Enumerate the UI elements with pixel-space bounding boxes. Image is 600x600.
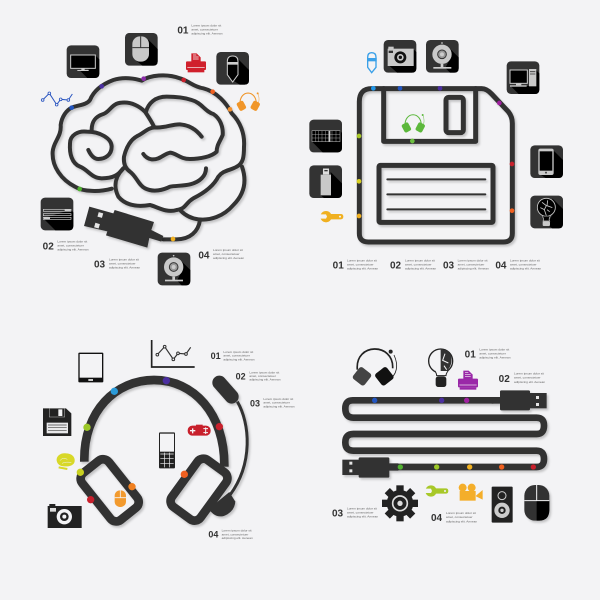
label 02: amet, consectetuer bbox=[57, 243, 84, 247]
icon: pencil bbox=[216, 52, 249, 85]
label 01: amet, consectetuer bbox=[191, 28, 218, 32]
label 03: adipiscing elit. Aenean bbox=[458, 267, 489, 271]
label 04 bbox=[495, 258, 541, 272]
label 01 bbox=[177, 24, 223, 36]
label 03 bbox=[443, 258, 489, 272]
label 03: 03 bbox=[332, 509, 344, 520]
label 01: Lorem ipsum dolor sit bbox=[479, 347, 509, 351]
icon: gamepad bbox=[188, 425, 211, 436]
icon: brain bbox=[57, 453, 75, 469]
icon: camera bbox=[384, 40, 416, 73]
label 03: Lorem ipsum dolor sit bbox=[458, 258, 488, 262]
label 04: amet, consectetuer bbox=[446, 515, 473, 519]
label 03: 03 bbox=[443, 261, 455, 272]
label 03: Lorem ipsum dolor sit bbox=[347, 506, 377, 510]
label 04: amet, consectetuer bbox=[222, 532, 248, 536]
label 02: 02 bbox=[236, 372, 246, 382]
usb cable bbox=[342, 390, 547, 478]
label 03: adipiscing elit. Aenean bbox=[109, 266, 140, 270]
icon: wrench bbox=[425, 485, 448, 497]
icon: headset bbox=[401, 114, 426, 133]
icon: line chart bbox=[41, 92, 72, 106]
cable dots bbox=[77, 377, 223, 503]
icon: printer bbox=[186, 53, 206, 72]
label 02 bbox=[390, 258, 436, 272]
label 02: amet, consectetuer bbox=[405, 262, 432, 266]
icon: usb stick bbox=[309, 165, 342, 198]
icon: speaker bbox=[492, 487, 513, 523]
label 04: 04 bbox=[431, 513, 443, 524]
label 04: amet, consectetuer bbox=[213, 252, 240, 256]
icon: phone bbox=[159, 432, 175, 468]
label 03 bbox=[332, 506, 378, 520]
label 01: amet, consectetuer bbox=[223, 354, 250, 358]
cable dots bbox=[372, 398, 536, 470]
icon: bulb bbox=[530, 196, 563, 228]
label 04: adipiscing elit. Aenean bbox=[446, 519, 477, 523]
icon: gear bbox=[382, 485, 418, 521]
headphones bbox=[78, 380, 247, 524]
label 04: 04 bbox=[208, 530, 218, 540]
icon: headset bbox=[236, 92, 261, 112]
label 02: Lorem ipsum dolor sit bbox=[514, 372, 544, 376]
label 01: amet, consectetuer bbox=[347, 262, 374, 266]
label 03: adipiscing elit. Aenean bbox=[263, 404, 295, 408]
label 01: adipiscing elit. Aenean bbox=[479, 356, 511, 360]
label 03: 03 bbox=[250, 398, 260, 408]
label 02: 02 bbox=[43, 241, 54, 252]
icon: webcam bbox=[158, 253, 190, 285]
label 03 bbox=[250, 397, 295, 408]
label 03: amet, consectetuer bbox=[347, 510, 374, 514]
icon: keyboard bbox=[309, 120, 342, 152]
label 01: 01 bbox=[465, 350, 476, 361]
icon: tablet bbox=[78, 353, 103, 382]
label 04 bbox=[431, 511, 477, 524]
label 04: Lorem ipsum dolor sit bbox=[213, 248, 243, 252]
label 02: amet, consectetuer bbox=[249, 374, 276, 378]
icon: bulb with brain bbox=[429, 349, 453, 387]
label 04 bbox=[208, 529, 253, 540]
label 04 bbox=[198, 248, 244, 261]
icon: blue pencil bbox=[368, 53, 376, 73]
label 04: 04 bbox=[495, 261, 507, 272]
label 02: adipiscing elit. Aenean bbox=[514, 380, 545, 384]
panel: usb cable bbox=[332, 347, 549, 524]
label 04: Lorem ipsum dolor sit bbox=[510, 258, 540, 262]
label 03: amet, consectetuer bbox=[263, 401, 290, 405]
label 01 bbox=[333, 258, 378, 272]
icon: computer bbox=[507, 61, 539, 94]
label 02: Lorem ipsum dolor sit bbox=[405, 258, 435, 262]
label 02: 02 bbox=[499, 374, 510, 385]
icon: wrench bbox=[320, 211, 343, 222]
icon: floppy bbox=[43, 408, 71, 436]
label 01: adipiscing elit. Aenean bbox=[347, 267, 378, 271]
icon: mouse bbox=[115, 490, 126, 507]
label 02: amet, consectetuer bbox=[514, 376, 541, 380]
label 03: Lorem ipsum dolor sit bbox=[263, 397, 293, 401]
label 04: adipiscing elit. Aenean bbox=[510, 267, 541, 271]
plug holes bbox=[349, 396, 539, 472]
brain cable bbox=[53, 75, 244, 239]
label 01: 01 bbox=[333, 261, 344, 272]
usb plug bbox=[84, 207, 163, 248]
label 02: Lorem ipsum dolor sit bbox=[249, 370, 279, 374]
icon: camera bbox=[48, 504, 82, 528]
icon: phone bbox=[530, 145, 563, 178]
label 01: adipiscing elit. Aenean bbox=[223, 357, 255, 361]
panel: floppy disk bbox=[309, 40, 563, 272]
cable dots bbox=[69, 76, 232, 241]
label 04: 04 bbox=[198, 250, 210, 261]
icon: printer bbox=[458, 371, 478, 390]
label 01: Lorem ipsum dolor sit bbox=[191, 24, 221, 28]
label 01: amet, consectetuer bbox=[479, 351, 506, 355]
label 02 bbox=[43, 239, 89, 252]
label 01 bbox=[211, 350, 255, 361]
label 02 bbox=[499, 372, 545, 385]
label 04: amet, consectetuer bbox=[510, 262, 537, 266]
label 04: adipiscing elit. Aenean bbox=[213, 256, 244, 260]
icon: mouse bbox=[125, 33, 158, 66]
label 01 bbox=[465, 347, 511, 361]
icon: headset bbox=[352, 349, 397, 387]
label 01: Lorem ipsum dolor sit bbox=[223, 350, 253, 354]
label 03 bbox=[94, 258, 140, 271]
label 02: adipiscing elit. Aenean bbox=[57, 247, 89, 251]
label 04: Lorem ipsum dolor sit bbox=[222, 529, 252, 533]
label 01: adipiscing elit. Aenean bbox=[191, 32, 223, 36]
label 03: 03 bbox=[94, 260, 106, 271]
icon: webcam bbox=[426, 40, 459, 73]
label 04: Lorem ipsum dolor sit bbox=[446, 511, 476, 515]
panel: brain bbox=[41, 24, 261, 285]
label 03: amet, consectetuer bbox=[109, 262, 136, 266]
label 03: adipiscing elit. Aenean bbox=[347, 515, 378, 519]
label 01: 01 bbox=[211, 351, 221, 361]
label 02: adipiscing elit. Aenean bbox=[249, 378, 281, 382]
cable dots bbox=[357, 86, 514, 218]
icon: monitor bbox=[67, 45, 99, 78]
icon: video camera bbox=[459, 484, 483, 501]
icon: line chart bbox=[152, 340, 195, 367]
label 02: adipiscing elit. Aenean bbox=[405, 267, 436, 271]
label 02: 02 bbox=[390, 261, 402, 272]
panel: headphones bbox=[43, 340, 295, 540]
label 02: Lorem ipsum dolor sit bbox=[57, 239, 87, 243]
icon: mouse bbox=[524, 485, 549, 521]
floppy outline bbox=[359, 89, 512, 242]
label 01: 01 bbox=[177, 25, 189, 36]
label 02 bbox=[236, 370, 281, 382]
label 04: adipiscing elit. Aenean bbox=[222, 536, 253, 540]
label 01: Lorem ipsum dolor sit bbox=[347, 258, 377, 262]
icon: list bbox=[41, 198, 73, 230]
label 03: Lorem ipsum dolor sit bbox=[109, 258, 139, 262]
label 03: amet, consectetuer bbox=[458, 262, 484, 266]
